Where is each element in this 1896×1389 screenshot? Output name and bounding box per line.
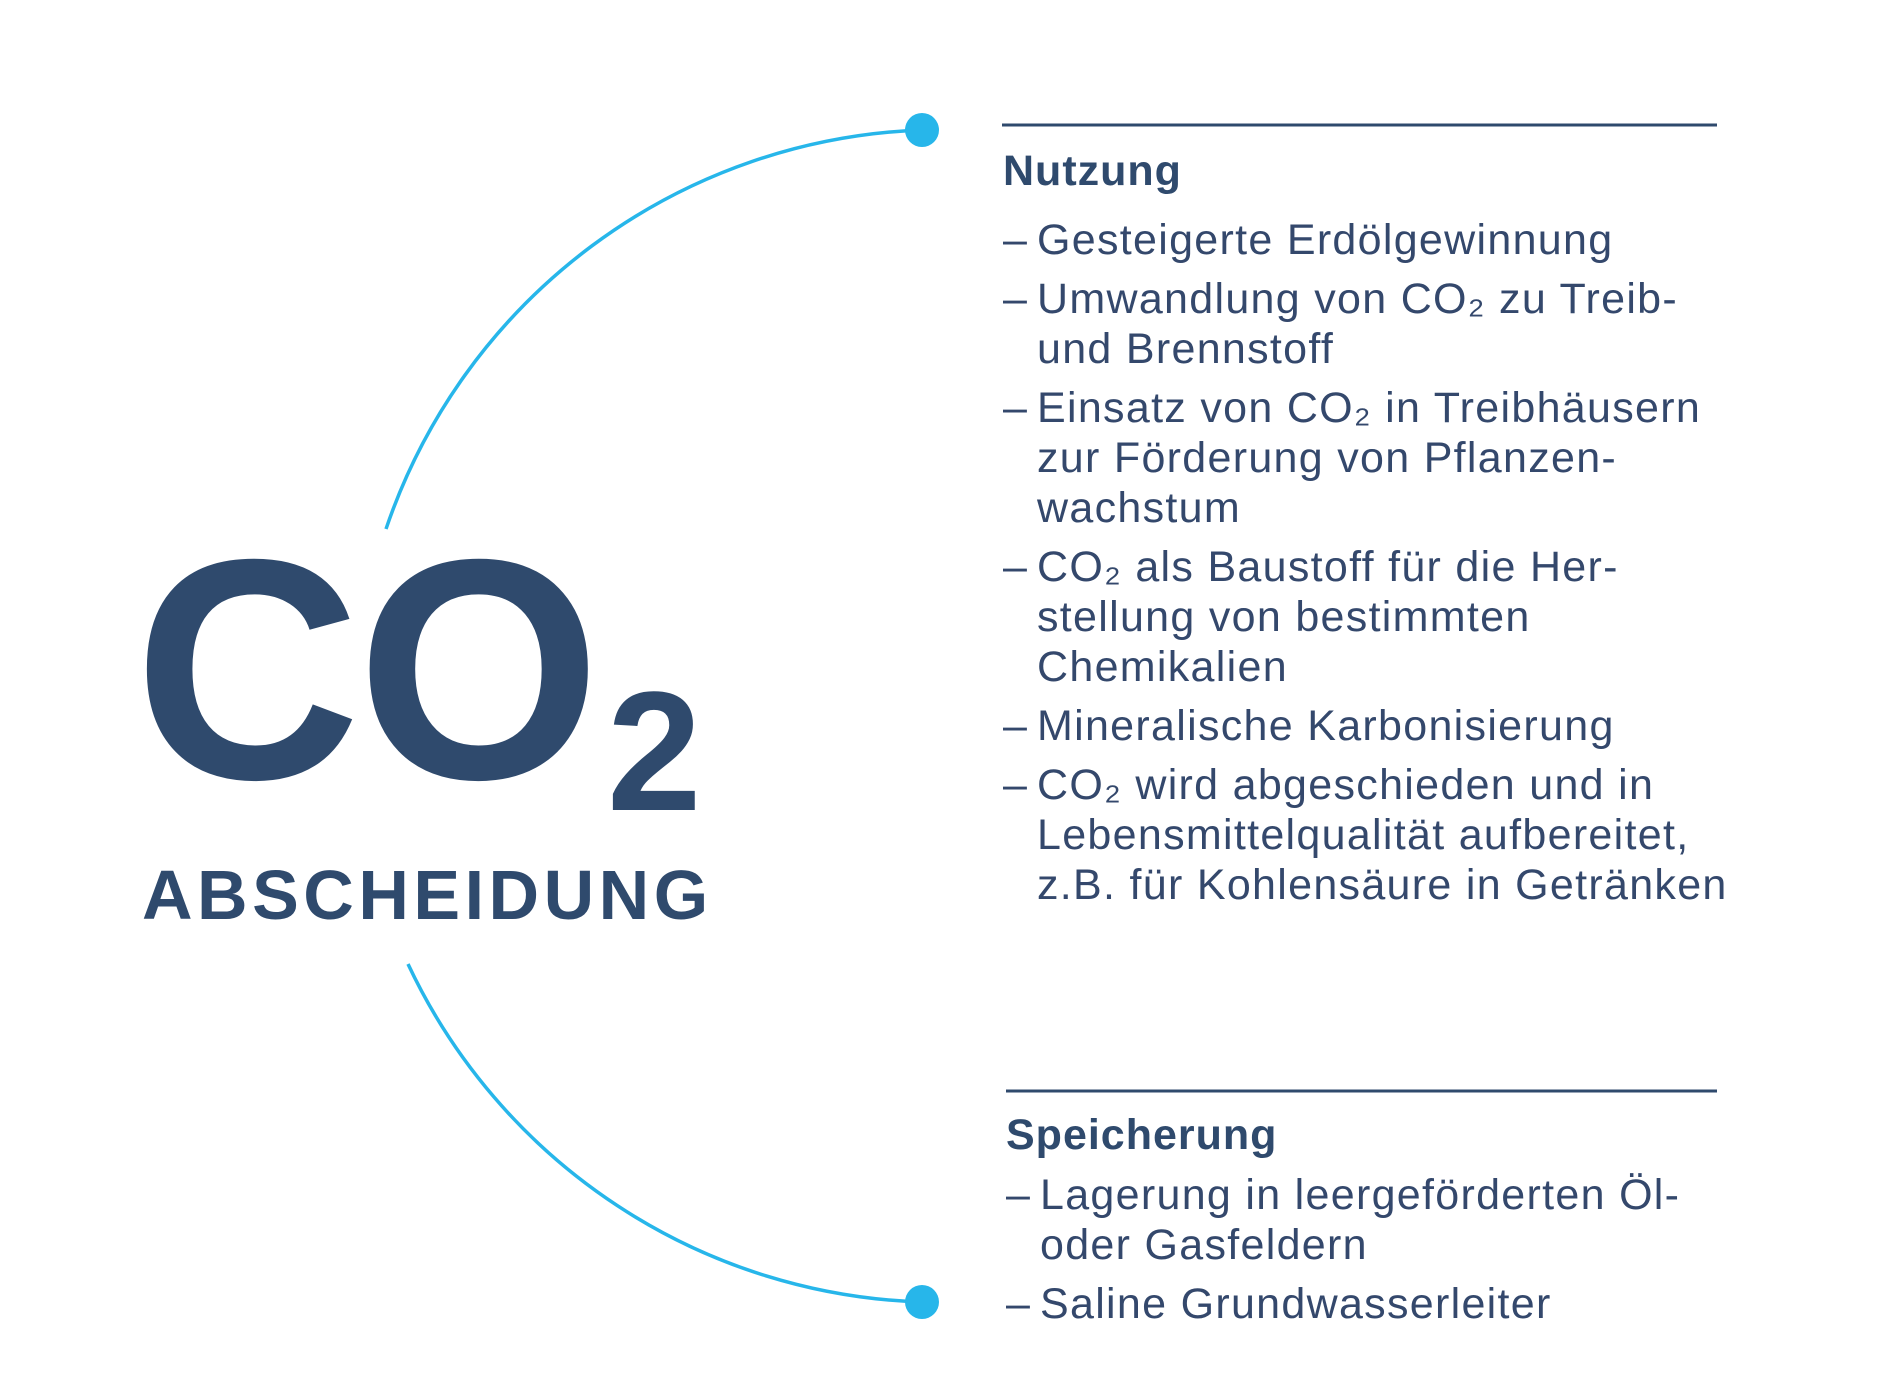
list item: stellung von bestimmten bbox=[1037, 593, 1531, 641]
dot: bottom bbox=[905, 1285, 939, 1319]
list item: Einsatz von CO₂ in Treibhäusern bbox=[1037, 384, 1701, 432]
list item: wachstum bbox=[1037, 484, 1241, 532]
arc: bottom bbox=[408, 964, 922, 1302]
panel: Nutzung bbox=[1003, 147, 1728, 909]
dot: top bbox=[905, 113, 939, 147]
list item: – bbox=[1003, 384, 1028, 432]
list item: CO₂ als Baustoff für die Her- bbox=[1037, 543, 1619, 591]
list item: – bbox=[1006, 1280, 1031, 1328]
list item: und Brennstoff bbox=[1037, 325, 1334, 373]
list item bbox=[1003, 275, 1678, 373]
list item: – bbox=[1003, 216, 1028, 264]
heading: Speicherung: Speicherung bbox=[1006, 1111, 1277, 1159]
list item: Umwandlung von CO₂ zu Treib- bbox=[1037, 275, 1678, 323]
list item bbox=[1003, 761, 1728, 909]
subtitle: ABSCHEIDUNG: ABSCHEIDUNG bbox=[142, 856, 713, 934]
list item: Lagerung in leergeförderten Öl- bbox=[1040, 1171, 1680, 1219]
list item: Gesteigerte Erdölgewinnung bbox=[1037, 216, 1613, 264]
list item: Lebensmittelqualität aufbereitet, bbox=[1037, 811, 1689, 859]
list item: Saline Grundwasserleiter bbox=[1040, 1280, 1552, 1328]
list item: CO₂ wird abgeschieden und in bbox=[1037, 761, 1654, 809]
panel: Speicherung bbox=[1006, 1111, 1680, 1328]
list item: – bbox=[1003, 761, 1028, 809]
list item: – bbox=[1003, 275, 1028, 323]
arc: top bbox=[386, 130, 922, 529]
list item: – bbox=[1003, 702, 1028, 750]
list item bbox=[1003, 384, 1701, 532]
list item: Chemikalien bbox=[1037, 643, 1288, 691]
list item bbox=[1006, 1171, 1680, 1269]
list item: – bbox=[1003, 543, 1028, 591]
title: CO2: CO2 bbox=[134, 494, 702, 847]
list item: oder Gasfeldern bbox=[1040, 1221, 1368, 1269]
list item: zur Förderung von Pflanzen- bbox=[1037, 434, 1617, 482]
list item bbox=[1003, 543, 1619, 691]
list item: z.B. für Kohlensäure in Getränken bbox=[1037, 861, 1728, 909]
heading: Nutzung: Nutzung bbox=[1003, 147, 1182, 195]
list item: – bbox=[1006, 1171, 1031, 1219]
list item: Mineralische Karbonisierung bbox=[1037, 702, 1615, 750]
